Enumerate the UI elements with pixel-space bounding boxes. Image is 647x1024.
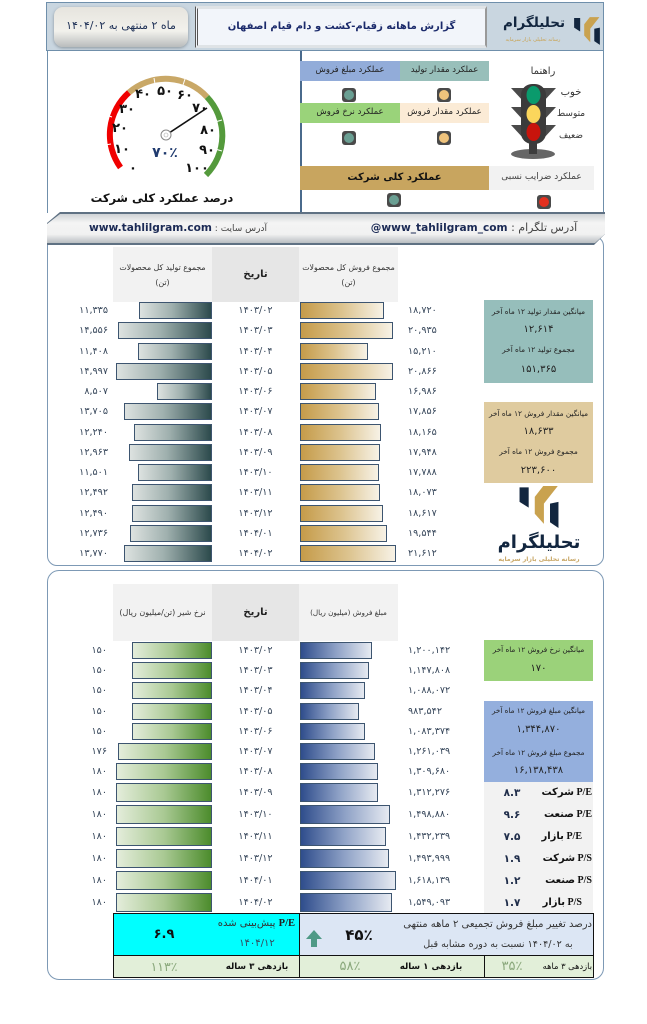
row — [300, 827, 470, 844]
row — [79, 343, 212, 360]
row: ۱۶,۹۸۶ — [408, 386, 437, 397]
gauge chart: ۷۰ — [192, 101, 208, 116]
report title — [195, 6, 487, 48]
row — [92, 662, 212, 679]
row — [79, 403, 212, 420]
row — [300, 464, 437, 481]
ratio: market P/E: ۷.۵ — [504, 831, 520, 843]
lamp: sales amount — [342, 88, 356, 102]
row — [300, 763, 470, 780]
row: ۱۵,۲۱۰ — [408, 346, 437, 356]
row — [300, 642, 470, 659]
row: ۱۸۰ — [92, 766, 107, 777]
summary box: production: میانگین مقدار تولید ۱۲ ماه آخر — [492, 307, 585, 316]
row — [300, 302, 437, 319]
row: ۱۸,۱۶۵ — [408, 426, 437, 438]
row — [300, 505, 437, 522]
date column: ۱۴۰۳/۰۹ — [238, 447, 273, 458]
row: ۱,۰۸۳,۳۷۴ — [408, 726, 450, 736]
gauge heading: درصد عملکرد کلی شرکت — [91, 191, 233, 205]
row — [300, 484, 437, 501]
row — [300, 424, 437, 441]
return value: ۵۸٪ — [340, 959, 360, 974]
row — [60, 893, 212, 910]
date button: ماه ۲ منتهی به ۱۴۰۴/۰۲ — [66, 19, 176, 32]
row — [300, 343, 437, 360]
row: ۱,۲۰۰,۱۴۲ — [408, 645, 450, 656]
row: ۱,۴۹۳,۹۹۹ — [408, 853, 450, 864]
row — [79, 464, 212, 481]
summary box: sales rate — [484, 640, 593, 681]
date column: ۱۴۰۴/۰۲ — [238, 897, 273, 908]
date column: ۱۴۰۳/۱۱ — [238, 487, 273, 498]
icon: traffic light — [511, 84, 556, 159]
column header: total production: مجموع تولید کل محصولات — [119, 262, 206, 272]
summary box: sales: ۱۸,۶۳۳ — [523, 426, 554, 437]
bar chart: sales tons — [300, 302, 437, 562]
return value: ۱۱۳٪ — [151, 959, 177, 974]
bar chart: sales amount — [300, 642, 470, 913]
column header: total sales: مجموع فروش کل محصولات — [302, 262, 395, 272]
row — [300, 383, 437, 400]
row — [79, 444, 212, 461]
ratio: company P/S: ۱.۹ — [504, 853, 520, 865]
summary box: sales: مجموع فروش ۱۲ ماه آخر — [499, 447, 578, 456]
row: ۲۱,۶۱۲ — [408, 548, 437, 559]
summary box: sales amount: میانگین مبلغ فروش ۱۲ ماه آخر — [492, 706, 585, 715]
legend: weak: ضعیف — [559, 131, 583, 141]
row — [300, 403, 437, 420]
summary box: sales: ۲۲۳,۶۰۰ — [521, 465, 556, 476]
bar chart: production tons — [79, 302, 212, 562]
divider — [300, 51, 302, 213]
row: ۱۲,۲۴۰ — [79, 426, 108, 438]
row — [79, 545, 212, 562]
date column: ۱۴۰۳/۰۶ — [238, 726, 273, 736]
gauge chart: ۱۰۰ — [185, 161, 209, 176]
header logo — [503, 14, 600, 45]
row: ۸,۵۰۷ — [84, 386, 108, 397]
row — [300, 662, 470, 679]
performance cell: sales amount — [300, 61, 400, 81]
row: ۱,۱۴۷,۸۰۸ — [408, 665, 450, 676]
sales change box — [299, 913, 594, 956]
row — [79, 505, 212, 522]
bar chart: share rate — [92, 642, 212, 912]
address band — [47, 212, 605, 245]
header bar — [46, 2, 604, 51]
logo wordmark: تحلیلگرام — [498, 532, 580, 553]
row: ۱۸,۷۲۰ — [408, 305, 437, 316]
date column — [212, 642, 299, 913]
row — [60, 805, 212, 822]
summary box: sales rate: ۱۷۰ — [530, 663, 547, 674]
gauge chart: ۳۰ — [119, 102, 135, 117]
row: ۱۸,۶۱۷ — [408, 508, 437, 518]
performance cell: sales quantity — [400, 103, 489, 123]
row: ۱۸۰ — [92, 831, 107, 842]
gauge chart: ۰ — [129, 161, 137, 176]
row — [92, 682, 212, 699]
row — [300, 871, 470, 888]
date column: ۱۴۰۴/۰۱ — [238, 528, 273, 539]
column header: date — [212, 584, 299, 641]
date column: ۱۴۰۳/۱۰ — [238, 467, 273, 478]
ratio: company P/S: P/S شرکت — [543, 853, 592, 864]
date column: ۱۴۰۳/۰۴ — [238, 685, 273, 696]
row: ۱۱,۴۰۸ — [79, 346, 108, 356]
row — [300, 682, 470, 699]
legend title: راهنما — [531, 66, 555, 77]
forecast P/E box — [113, 913, 300, 956]
column header: sales amount — [299, 584, 398, 641]
telegram address: آدرس تلگرام : @www_tahlilgram_com — [371, 221, 577, 234]
row: ۱,۰۸۸,۰۷۲ — [408, 685, 450, 696]
row: ۱۳,۷۷۰ — [79, 548, 108, 559]
overall performance heading — [300, 166, 489, 190]
summary box: sales rate: میانگین نرخ فروش ۱۲ ماه آخر — [493, 645, 584, 654]
column header: total production — [113, 247, 212, 302]
date column: ۱۴۰۳/۰۸ — [238, 766, 273, 777]
column header: sales amount: مبلغ فروش (میلیون ریال) — [310, 608, 387, 617]
date column: ۱۴۰۳/۰۲ — [238, 645, 273, 656]
row: ۱۷,۹۴۸ — [408, 447, 437, 458]
logo tagline: رسانه تحلیلی بازار سرمایه — [506, 37, 560, 43]
summary box: production — [484, 300, 593, 383]
date column: ۱۴۰۳/۱۲ — [238, 853, 273, 864]
change description line two: به ۱۴۰۴/۰۲ نسبت به دوره مشابه قبل — [423, 939, 573, 950]
lamp: relative ratios — [537, 195, 551, 209]
date column: ۱۴۰۳/۰۳ — [238, 325, 273, 336]
date column: ۱۴۰۳/۰۳ — [238, 665, 273, 676]
row: ۹۸۳,۵۴۲ — [408, 706, 442, 716]
lamp: overall performance — [387, 193, 401, 207]
three month return — [484, 955, 594, 978]
summary box: production: ۱۵۱,۳۶۵ — [521, 364, 556, 375]
date button — [54, 7, 188, 47]
row: ۱۵۰ — [92, 645, 107, 656]
gauge chart: ۵۰ — [157, 84, 173, 99]
row: ۱۲,۹۶۳ — [79, 447, 108, 458]
row: ۲۰,۹۳۵ — [408, 325, 437, 336]
row — [300, 849, 470, 866]
relative ratios heading — [489, 166, 594, 190]
overall performance heading: عملکرد کلی شرکت — [347, 172, 442, 183]
row: ۱۸۰ — [92, 787, 107, 798]
logo wordmark: تحلیلگرام — [503, 15, 565, 31]
row — [60, 871, 212, 888]
date column: ۱۴۰۳/۰۷ — [238, 746, 273, 757]
row: ۱۵۰ — [92, 726, 107, 736]
row: ۱۸۰ — [92, 875, 107, 886]
change description: درصد تغییر مبلغ فروش تجمیعی ۲ ماهه منتهی — [403, 919, 592, 930]
website address: آدرس سایت : www.tahlilgram.com — [89, 222, 267, 234]
date column — [238, 305, 273, 559]
column header: total sales — [299, 247, 398, 302]
date column: ۱۴۰۳/۱۲ — [238, 508, 273, 518]
row: ۱۲,۴۹۰ — [79, 508, 108, 518]
ratio: industry P/S — [484, 870, 593, 892]
row: ۱۲,۴۹۲ — [79, 487, 108, 498]
valuation ratios table — [484, 782, 593, 914]
ratio: market P/S: P/S بازار — [543, 897, 582, 908]
ratio: company P/E: ۸.۳ — [504, 787, 520, 799]
row — [60, 783, 212, 800]
row — [79, 322, 212, 339]
summary box: sales amount — [484, 701, 593, 782]
row — [300, 702, 470, 720]
ratio: company P/E: P/E شرکت — [541, 787, 592, 798]
row: ۱۴,۹۹۷ — [79, 366, 108, 377]
row: ۱,۵۴۹,۰۹۳ — [408, 897, 450, 908]
forecast date: ۱۴۰۴/۱۲ — [239, 938, 275, 949]
ratio: company P/E — [484, 782, 593, 804]
summary box: sales amount: ۱,۳۴۴,۸۷۰ — [517, 724, 560, 735]
row — [92, 642, 212, 659]
row — [84, 383, 212, 400]
performance cell: sales rate: عملکرد نرخ فروش — [316, 107, 384, 117]
row: ۱۴,۵۵۶ — [79, 325, 108, 336]
column header: share rate — [113, 584, 212, 641]
row — [300, 893, 470, 910]
panel: production and sales quantity — [47, 236, 604, 566]
row — [92, 703, 212, 720]
column header: total production: (تن) — [155, 278, 170, 286]
gauge chart — [106, 76, 226, 178]
panel: sales amount and rate — [47, 570, 604, 980]
row — [300, 545, 437, 562]
row — [60, 827, 212, 844]
summary box: sales amount: ۱۶,۱۳۸,۴۳۸ — [514, 765, 563, 776]
summary box: production: مجموع تولید ۱۲ ماه آخر — [502, 345, 575, 354]
summary box: sales — [484, 402, 593, 483]
gauge chart: ۶۰ — [177, 88, 193, 103]
forecast value: ۶.۹ — [154, 927, 174, 942]
ratio: industry P/S: P/S صنعت — [545, 875, 592, 886]
row: ۱۵۰ — [92, 665, 107, 676]
date column: ۱۴۰۴/۰۲ — [238, 548, 273, 559]
row — [300, 363, 437, 380]
legend: good: خوب — [561, 87, 581, 98]
date column: ۱۴۰۳/۰۷ — [238, 406, 273, 417]
row — [300, 444, 437, 461]
row: ۱۸,۰۷۳ — [408, 487, 437, 498]
performance cell: sales amount: عملکرد مبلغ فروش — [315, 65, 385, 75]
column header: date: تاریخ — [243, 607, 268, 618]
row — [60, 722, 212, 740]
row — [79, 302, 212, 319]
row — [300, 783, 470, 800]
date column: ۱۴۰۳/۱۰ — [238, 809, 273, 820]
return label: بازدهی ۳ ساله — [226, 962, 288, 972]
change percent: ۴۵٪ — [345, 926, 373, 944]
date column: ۱۴۰۳/۰۲ — [238, 305, 273, 316]
row: ۱,۳۰۹,۶۸۰ — [408, 766, 450, 777]
row: ۱۳,۷۰۵ — [79, 406, 108, 417]
row: ۱,۴۳۲,۲۳۹ — [408, 831, 450, 842]
row — [300, 322, 437, 339]
column header: total sales: (تن) — [341, 278, 356, 286]
row — [60, 743, 212, 760]
row — [300, 722, 470, 740]
date column: ۱۴۰۳/۰۶ — [238, 386, 273, 397]
row: ۱۷,۷۸۸ — [408, 467, 437, 478]
date column: ۱۴۰۳/۰۵ — [238, 706, 273, 716]
panel: performance summary — [47, 51, 604, 213]
gauge chart: ۸۰ — [200, 123, 216, 138]
lamp: production quantity — [437, 88, 451, 102]
performance cell: sales quantity: عملکرد مقدار فروش — [407, 107, 482, 117]
gauge chart: ۱۰ — [114, 142, 130, 157]
row: ۱۸۰ — [92, 897, 107, 908]
legend: medium: متوسط — [557, 109, 585, 119]
row: ۱۷,۸۵۶ — [408, 406, 437, 417]
one year return — [299, 955, 485, 978]
forecast label: P/E پیش‌بینی شده — [218, 918, 295, 929]
brand logo — [498, 486, 580, 563]
icon: up arrow — [306, 930, 322, 947]
column header: date — [212, 247, 299, 302]
gauge chart: ۷۰٪ — [152, 145, 178, 161]
row: ۱۸۰ — [92, 853, 107, 864]
gauge chart: ۹۰ — [199, 143, 215, 158]
row: ۱۸۰ — [92, 809, 107, 820]
ratio: market P/S: ۱.۷ — [504, 897, 520, 909]
row — [300, 525, 437, 542]
three year return — [113, 955, 300, 978]
return label: بازدهی ۱ ساله — [400, 962, 462, 972]
row: ۱۲,۷۳۶ — [79, 528, 108, 539]
ratio: company P/S — [484, 848, 593, 870]
row: ۱۱,۵۰۱ — [79, 467, 108, 478]
row: ۱۵۰ — [92, 706, 107, 716]
summary box: production: ۱۲,۶۱۴ — [523, 324, 554, 335]
ratio: industry P/E — [484, 804, 593, 826]
relative ratios heading: عملکرد ضرایب نسبی — [501, 172, 582, 182]
column header: date: تاریخ — [243, 269, 268, 280]
performance cell: production quantity: عملکرد مقدار تولید — [411, 65, 478, 75]
ratio: market P/E — [484, 826, 593, 848]
row: ۱,۳۱۲,۲۷۶ — [408, 787, 450, 798]
row: ۱۵۰ — [92, 685, 107, 696]
row — [79, 363, 212, 380]
gauge chart: ۴۰ — [135, 87, 151, 102]
row — [300, 805, 470, 822]
date column: ۱۴۰۳/۱۱ — [238, 831, 273, 842]
logo mark — [574, 17, 600, 45]
row: ۱۹,۵۴۴ — [408, 528, 437, 539]
ratio: market P/E: P/E بازار — [541, 831, 582, 842]
logo mark — [520, 486, 558, 528]
date column: ۱۴۰۳/۰۵ — [238, 366, 273, 377]
summary box: sales: میانگین مقدار فروش ۱۲ ماه آخر — [489, 409, 588, 418]
lamp: sales rate — [342, 131, 356, 145]
date column: ۱۴۰۳/۰۴ — [238, 346, 273, 356]
row — [300, 743, 470, 760]
ratio: industry P/S: ۱.۲ — [504, 875, 520, 887]
ratio: industry P/E: ۹.۶ — [504, 809, 520, 821]
date column: ۱۴۰۳/۰۸ — [238, 426, 273, 438]
row: ۱۷۶ — [92, 746, 107, 757]
row: ۱,۴۹۸,۸۸۰ — [408, 809, 450, 820]
logo tagline: رسانه تحلیلی بازار سرمایه — [498, 556, 580, 563]
return label: بازدهی ۳ ماهه — [543, 961, 592, 971]
return value: ۳۵٪ — [502, 959, 522, 974]
row — [60, 849, 212, 866]
gauge chart: ۲۰ — [112, 121, 128, 136]
lamp: sales quantity — [437, 131, 451, 145]
ratio: market P/S — [484, 892, 593, 914]
report title: گزارش ماهانه زقیام-کشت و دام قیام اصفهان — [228, 21, 455, 32]
performance cell: production quantity — [400, 61, 489, 81]
column header: share rate: نرخ شیر (تن/میلیون ریال) — [119, 608, 206, 617]
ratio: industry P/E: P/E صنعت — [544, 809, 592, 820]
row — [79, 424, 212, 441]
row: ۱,۶۱۸,۱۳۹ — [408, 875, 450, 886]
row: ۱,۲۶۱,۰۳۹ — [408, 746, 450, 757]
summary box: sales amount: مجموع مبلغ فروش ۱۲ ماه آخر — [493, 748, 584, 757]
row: ۱۱,۳۳۵ — [79, 305, 108, 316]
row — [79, 525, 212, 542]
row: ۲۰,۸۶۶ — [408, 366, 437, 377]
row — [60, 763, 212, 780]
date column: ۱۴۰۳/۰۹ — [238, 787, 273, 798]
performance cell: sales rate — [300, 103, 400, 123]
date column: ۱۴۰۴/۰۱ — [238, 875, 273, 886]
row — [79, 484, 212, 501]
